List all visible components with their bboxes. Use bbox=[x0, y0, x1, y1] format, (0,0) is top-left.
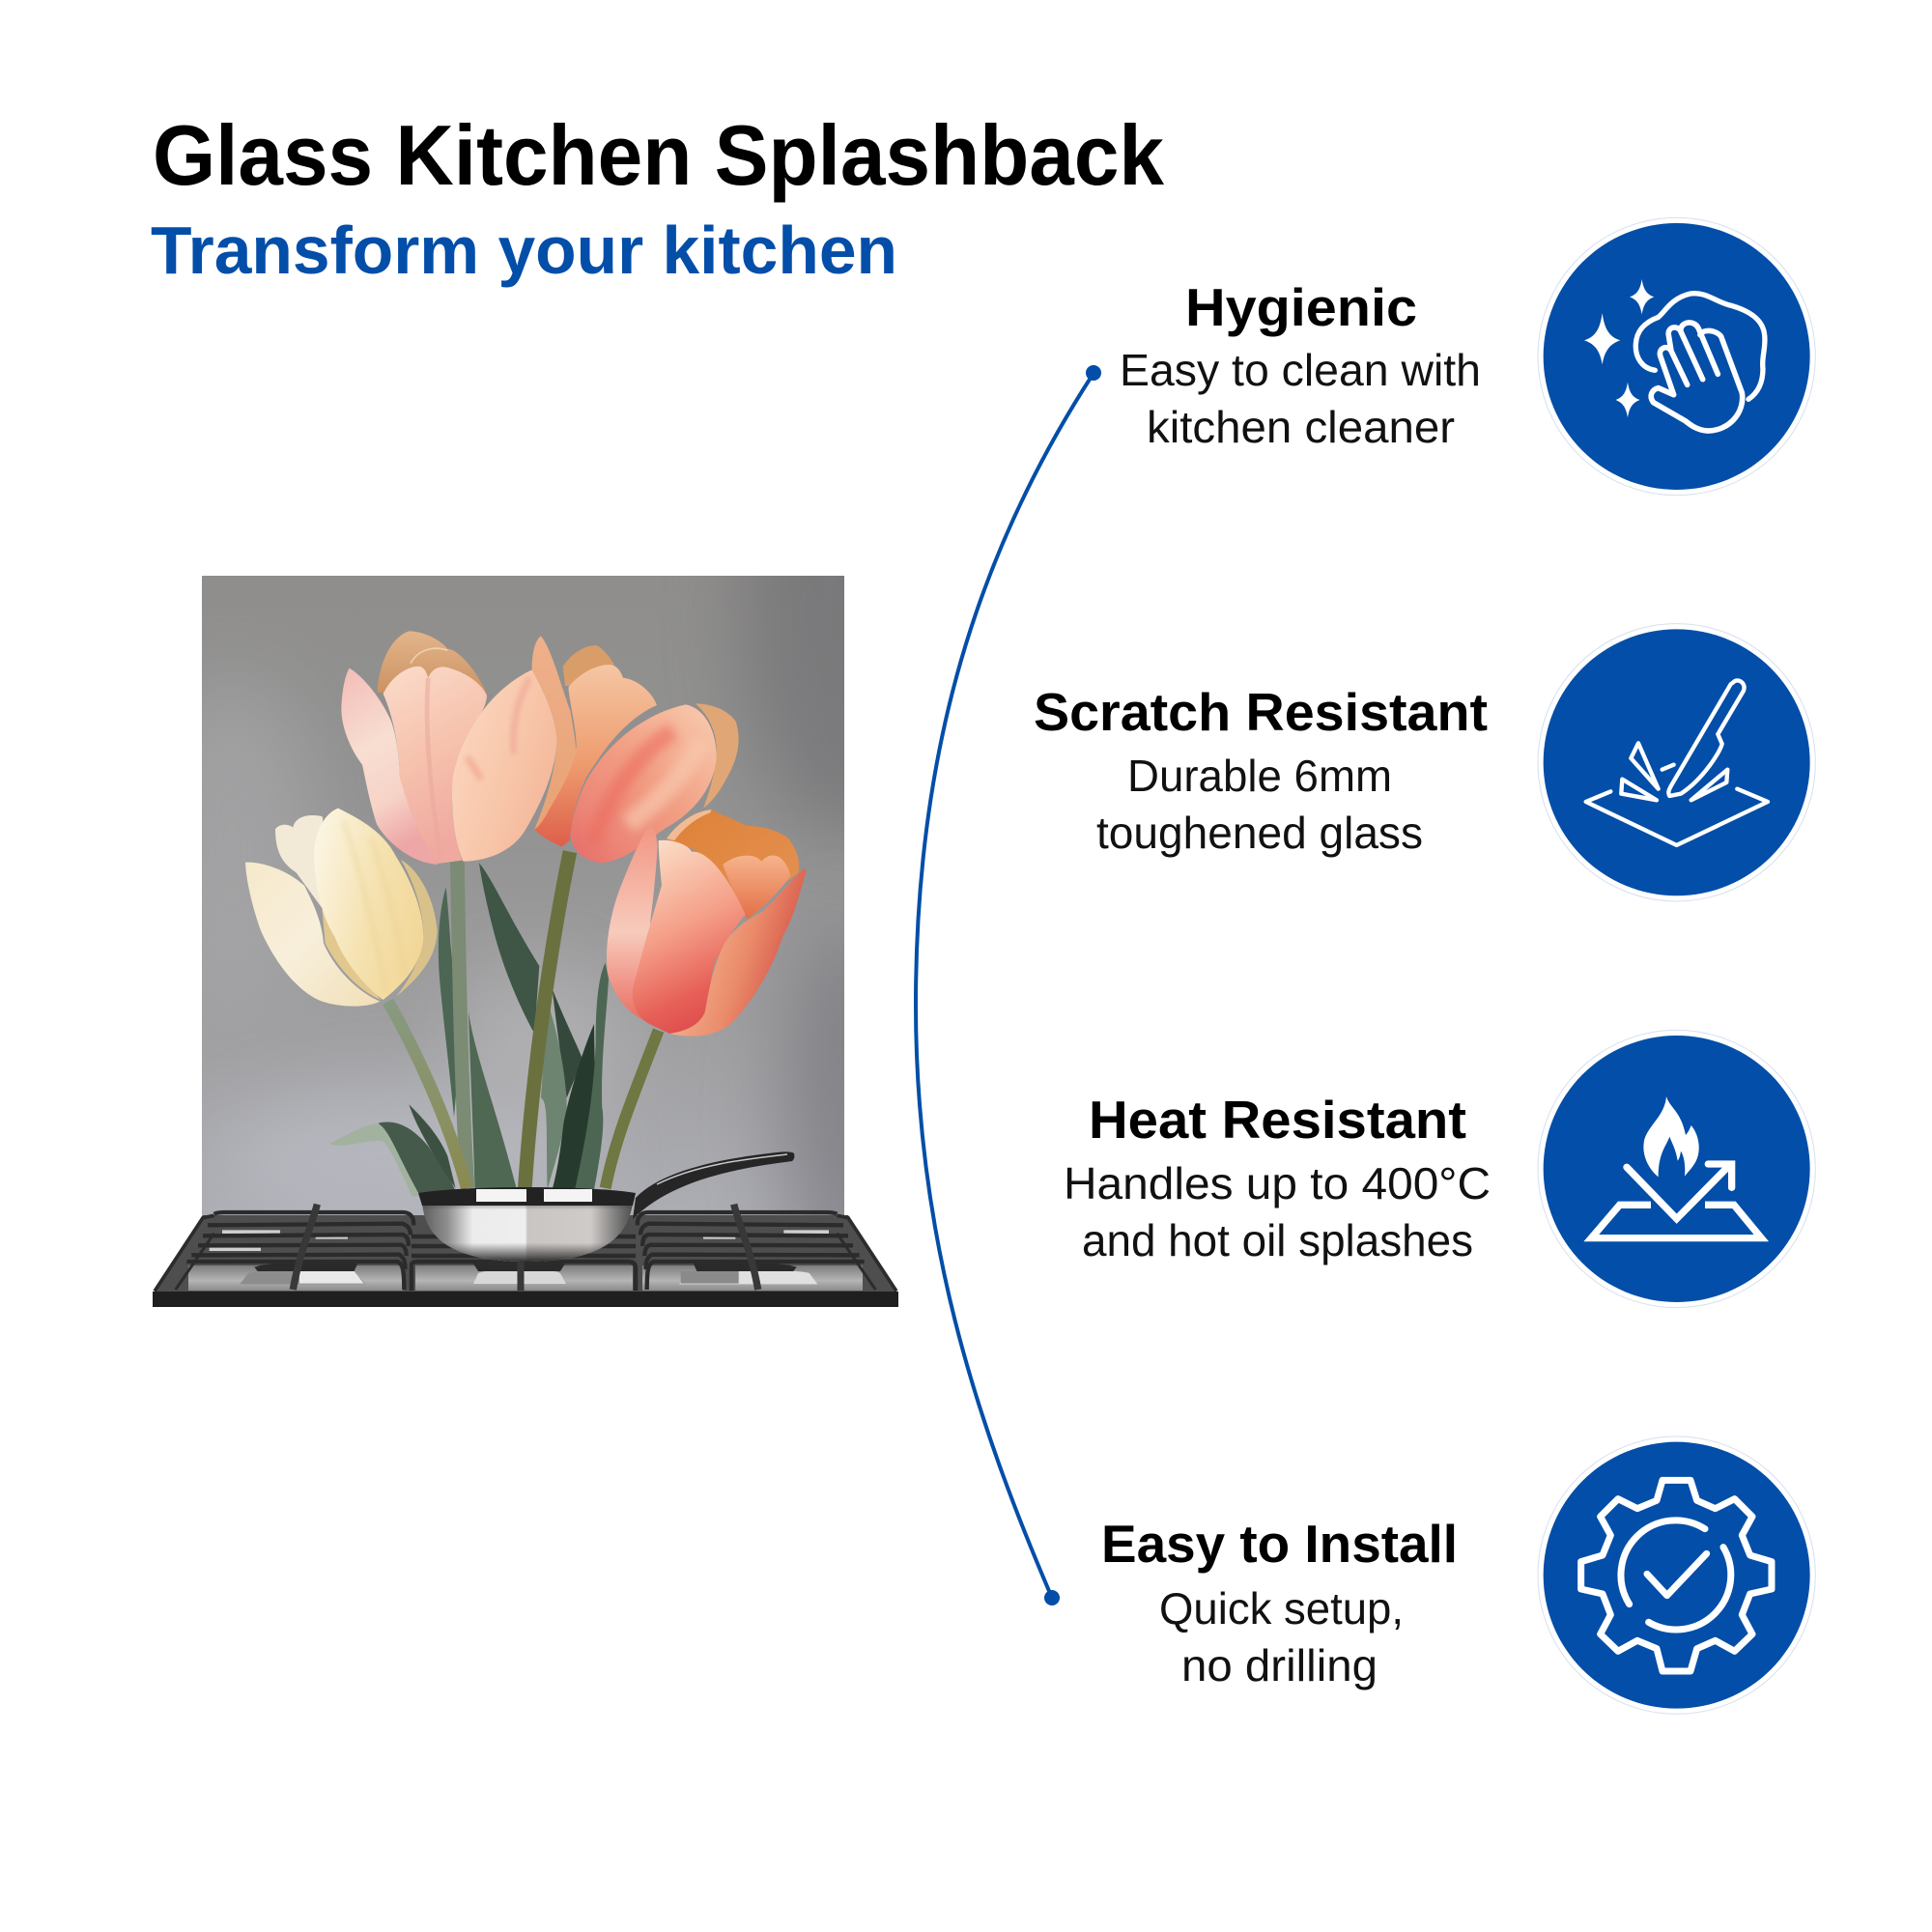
orange-peach tulip bbox=[532, 636, 739, 863]
pink-peach tulip bbox=[341, 631, 557, 865]
dark grate base bbox=[153, 1215, 898, 1294]
title: Glass Kitchen Splashback bbox=[153, 107, 1165, 203]
frying pan bbox=[418, 1151, 794, 1262]
left grate section bbox=[155, 1205, 413, 1292]
feature: hygienic bbox=[1120, 217, 1815, 496]
heading: scratch resistant: Scratch Resistant bbox=[1034, 682, 1488, 742]
icon: hand wiping with sparkles bbox=[1538, 217, 1815, 496]
description: easy to install: Quick setup, bbox=[1159, 1583, 1404, 1634]
description: easy to install: no drilling bbox=[1181, 1640, 1378, 1690]
stainless base sections bbox=[188, 1265, 863, 1291]
connector curve with end dots bbox=[916, 365, 1101, 1605]
description: hygienic: kitchen cleaner bbox=[1147, 402, 1455, 452]
heading: hygienic: Hygienic bbox=[1185, 277, 1417, 337]
description: scratch resistant: toughened glass bbox=[1096, 808, 1423, 858]
centre grate section bbox=[412, 1236, 636, 1291]
product illustration: splashback and cooktop bbox=[153, 576, 898, 1307]
feature: heat resistant bbox=[1064, 1030, 1815, 1308]
stems bbox=[388, 852, 659, 1188]
icon: flame and reflection bbox=[1538, 1030, 1815, 1308]
description: heat resistant: Handles up to 400°C bbox=[1064, 1158, 1491, 1208]
icon: gear with check mark bbox=[1538, 1436, 1815, 1714]
cooktop bbox=[153, 1205, 898, 1307]
feature: scratch resistant bbox=[1034, 624, 1815, 901]
feature: easy to install bbox=[1101, 1436, 1815, 1714]
heading: heat resistant: Heat Resistant bbox=[1089, 1090, 1466, 1150]
coral-red tulip bbox=[607, 810, 807, 1037]
description: scratch resistant: Durable 6mm bbox=[1127, 751, 1392, 801]
description: hygienic bbox=[1120, 345, 1481, 452]
front edge bbox=[153, 1292, 898, 1307]
right grate section bbox=[638, 1205, 896, 1292]
description: scratch resistant bbox=[1096, 751, 1423, 858]
leaves bbox=[329, 863, 609, 1196]
description: heat resistant: and hot oil splashes bbox=[1082, 1215, 1473, 1265]
subtitle: Transform your kitchen bbox=[151, 213, 897, 288]
description: easy to install bbox=[1159, 1583, 1404, 1690]
cream tulip bbox=[245, 809, 438, 1007]
splashback panel bbox=[202, 576, 844, 1216]
description: hygienic: Easy to clean with bbox=[1120, 345, 1481, 395]
heading: easy to install: Easy to Install bbox=[1101, 1514, 1458, 1574]
icon: knife on glass bbox=[1538, 624, 1815, 901]
description: heat resistant bbox=[1064, 1158, 1491, 1265]
